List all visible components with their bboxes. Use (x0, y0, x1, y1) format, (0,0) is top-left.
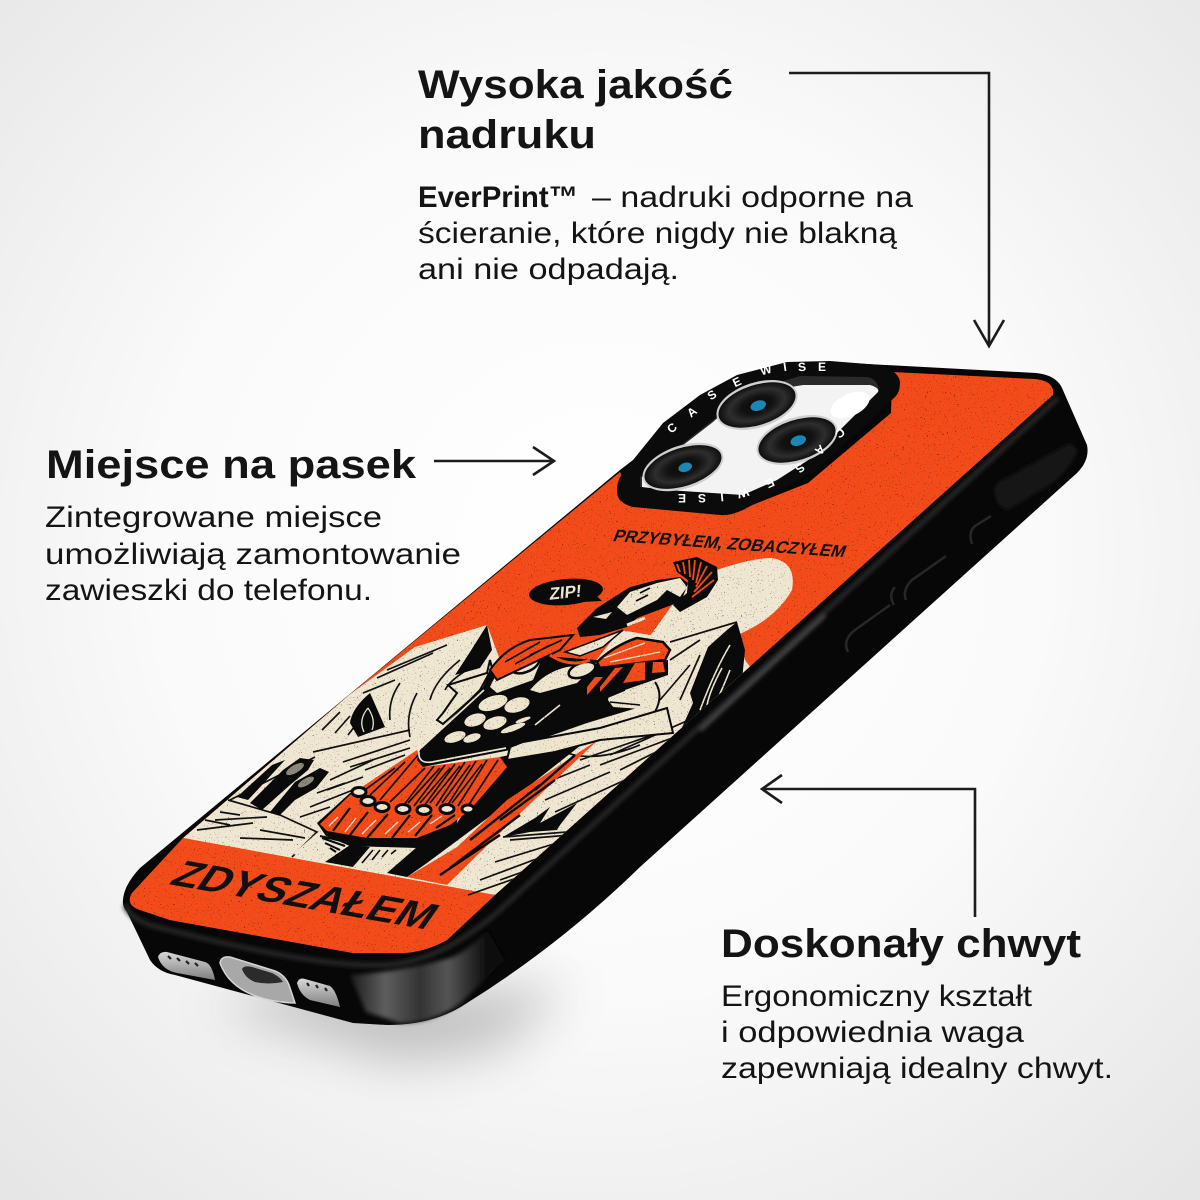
ring text: S (792, 460, 808, 476)
skirt (317, 750, 507, 848)
neck ring (550, 655, 590, 663)
red shoulder left (490, 635, 573, 680)
sun (650, 558, 793, 640)
camera window bevel (640, 376, 878, 495)
ring text: S (698, 491, 706, 505)
forearm (507, 708, 673, 760)
mouth and eye (593, 588, 650, 625)
trees (503, 803, 577, 837)
upper arm (608, 678, 662, 712)
speech bubble: ZIP! (549, 580, 582, 604)
hem (317, 793, 460, 848)
left mountain shadow (455, 625, 492, 675)
ring text: E (763, 475, 777, 491)
phone shadow (210, 985, 570, 1062)
glossy corner (350, 930, 505, 1023)
skirt studs (352, 788, 474, 814)
ring text: I (720, 490, 724, 504)
helmet plume (673, 557, 718, 612)
cape shadow (387, 746, 580, 877)
case body (123, 362, 1088, 1025)
strap slot (994, 443, 1078, 510)
heading: strap slot: Miejsce na pasek (46, 443, 417, 487)
heading: print quality: nadruku (418, 113, 596, 157)
plume accents (677, 560, 714, 597)
strip title: ZDYSZAŁEM (163, 854, 447, 937)
text: strap slot: umożliwiają zamontowanie (45, 538, 461, 571)
ring text (664, 360, 848, 505)
people silhouettes (237, 758, 329, 815)
block: print quality (418, 63, 913, 286)
heading: print quality (418, 63, 733, 157)
camera window (642, 385, 878, 495)
heading: print quality: Wysoka jakość (418, 63, 733, 107)
ring text: W (735, 485, 750, 501)
arrow: grip (762, 775, 975, 917)
heading: grip: Doskonały chwyt (721, 922, 1081, 966)
armor (417, 655, 640, 767)
strip (130, 838, 495, 953)
right speaker (297, 978, 340, 1007)
left speaker (158, 952, 215, 980)
flash (826, 386, 874, 424)
bump frame (617, 361, 900, 515)
hatching (197, 622, 737, 895)
right mountain shadow (680, 622, 745, 732)
ring text: S (705, 387, 719, 403)
text: print quality: EverPrint™ (418, 181, 578, 214)
phone case (100, 350, 1100, 1025)
tagline: PRZYBYŁEM, ZOBACZYŁEM (610, 526, 850, 561)
ring text: A (684, 404, 700, 420)
camera bump (617, 360, 900, 515)
rim highlight (125, 398, 1058, 965)
text: print quality: ścieranie, które nigdy nie blakną (418, 217, 897, 250)
charging port (220, 957, 295, 1003)
ring text: W (759, 362, 774, 378)
ring text: S (797, 360, 807, 374)
red base (130, 372, 1054, 953)
left arm (437, 660, 492, 724)
block: grip (721, 922, 1113, 1085)
ring text: A (812, 442, 828, 458)
ring text: C (664, 420, 680, 436)
text: strap slot: zawieszki do telefonu. (45, 574, 372, 607)
leaf (350, 693, 385, 737)
text: strap slot: Zintegrowane miejsce (45, 501, 382, 534)
lens right (750, 406, 844, 474)
head silhouette (577, 577, 688, 637)
cream landscape (183, 622, 760, 895)
neck (565, 630, 623, 656)
text: print quality: – nadruki odporne na (592, 181, 913, 214)
cape (407, 740, 598, 885)
lens left (636, 434, 730, 500)
ring text: C (832, 425, 848, 441)
red shoulder right (583, 638, 670, 700)
shoulder discs (513, 662, 596, 680)
face (617, 578, 687, 615)
armor outline (419, 690, 560, 762)
lens top (710, 371, 804, 439)
ring text: E (818, 360, 826, 374)
legs (294, 833, 396, 867)
text: grip (721, 980, 1113, 1085)
block: strap slot (45, 443, 461, 607)
text: grip: Ergonomiczny kształt (721, 980, 1033, 1013)
chest plates (490, 660, 597, 693)
text: grip: i odpowiednia waga (721, 1016, 1024, 1049)
arrow: print quality (789, 73, 1004, 346)
text: print quality: ani nie odpadają. (418, 253, 679, 286)
grain (130, 372, 1050, 953)
ring text: I (782, 360, 788, 374)
ring text: E (678, 491, 686, 505)
text: grip: zapewniają idealny chwyt. (721, 1052, 1113, 1085)
side buttons (846, 516, 991, 652)
rim gloss upper (700, 615, 825, 730)
text: strap slot (45, 501, 461, 607)
text: print quality (418, 181, 913, 286)
printed surface (130, 372, 1054, 953)
arrow: strap slot (434, 447, 554, 475)
abs (444, 694, 530, 743)
ring text: E (730, 374, 744, 390)
speech bubble (529, 578, 603, 606)
